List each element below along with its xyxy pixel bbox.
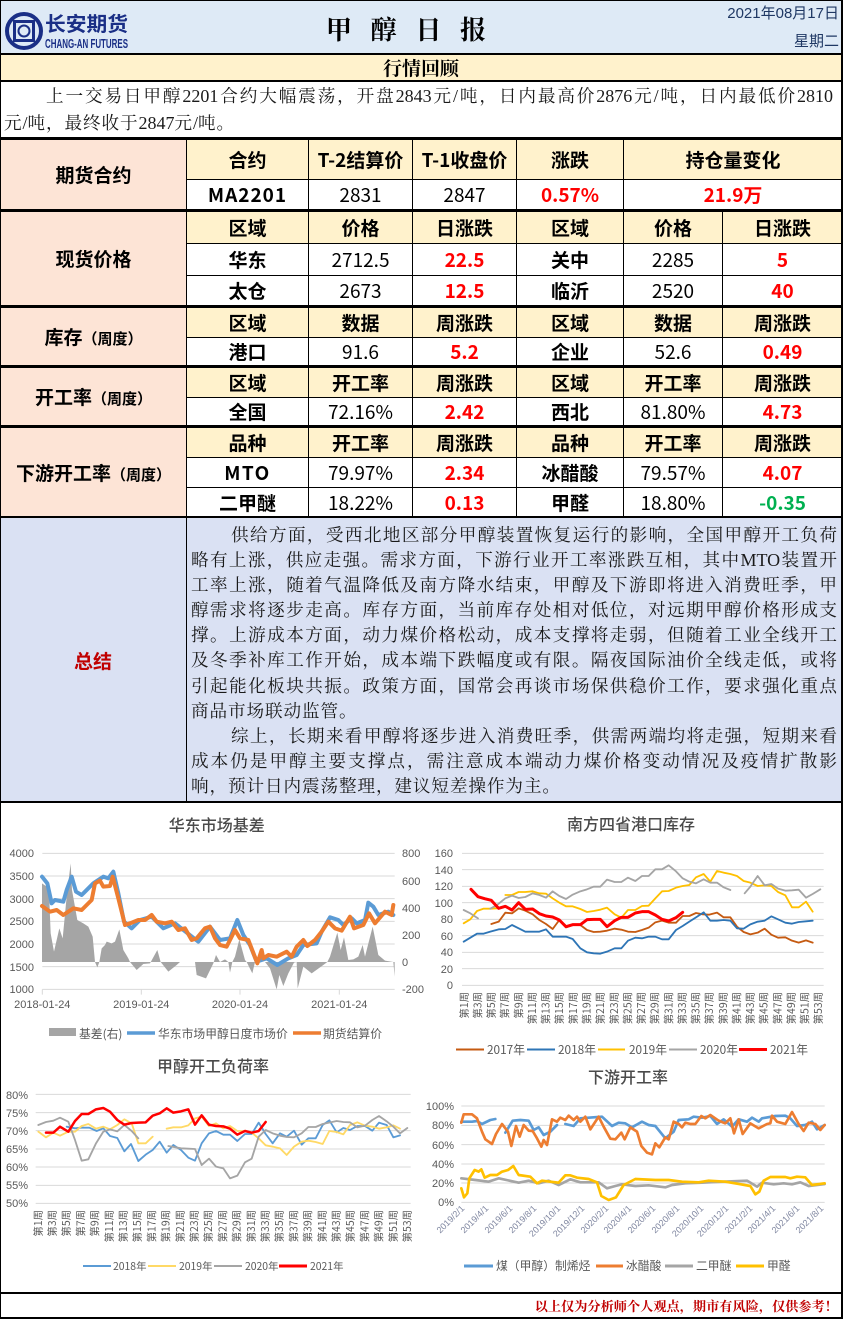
spot row 2: 2673 [339, 277, 382, 304]
chart: downstream operating rate [426, 1064, 825, 1274]
inventory header row [1, 308, 841, 365]
right axis labels: 0 [402, 957, 408, 969]
week axis labels: 第19周 [578, 992, 594, 1024]
spot header row: 区域 [551, 214, 589, 241]
summary text: 醇需求将逐步走高。库存方面，当前库存处相对低位，对远期甲醇价格形成支 [191, 600, 837, 620]
chart title: 华东市场基差 [169, 812, 265, 836]
panel: spot price [0, 210, 843, 306]
date axis labels: 2020/8/1 [650, 1203, 681, 1235]
operating rate values row: 全国 [228, 398, 266, 425]
date axis labels: 2021/8/1 [794, 1203, 825, 1235]
legend: 甲醛 [767, 1257, 791, 1274]
week axis labels: 第7周 [497, 992, 512, 1019]
y axis labels [426, 1101, 454, 1209]
legend: 2019年 [629, 1041, 667, 1058]
y axis labels: 55% [6, 1180, 28, 1192]
y axis labels: 50% [6, 1198, 28, 1210]
y axis labels: 75% [6, 1108, 28, 1120]
logo [5, 10, 128, 51]
week axis labels: 第53周 [399, 1210, 414, 1242]
week axis labels: 第19周 [158, 1210, 173, 1242]
week axis labels: 第13周 [115, 1210, 130, 1242]
week axis labels: 第3周 [44, 1210, 59, 1237]
operating rate values row: 4.73 [763, 398, 802, 425]
summary text: 工率上涨，随着气温降低及南方降水结束，甲醇及下游即将进入消费旺季，甲 [191, 575, 837, 595]
futures header row: 涨跌 [551, 146, 589, 173]
operating rate values row: 2.42 [445, 398, 484, 425]
panel: downstream operating rate: 下游开工率（周度） [16, 459, 171, 486]
summary text [191, 525, 837, 796]
panel: downstream operating rate [0, 426, 843, 518]
week axis labels: 第35周 [271, 1210, 286, 1242]
date axis labels: 2019/8/1 [507, 1203, 538, 1235]
y axis labels: 20 [441, 964, 453, 976]
week axis labels: 第7周 [72, 1210, 87, 1237]
downstream row 1: 2.34 [445, 459, 484, 486]
panel: operating rate [0, 366, 843, 426]
operating rate header row: 开工率 [332, 369, 389, 396]
date: 2021年08月17日 [727, 5, 839, 22]
inventory values row: 0.49 [763, 338, 802, 365]
date axis labels: 2020/4/1 [602, 1203, 633, 1235]
legend: 2021年 [310, 1258, 343, 1273]
y axis labels: 100 [435, 898, 453, 910]
y axis labels: 160 [435, 848, 453, 860]
spot row 1: 关中 [551, 246, 589, 273]
legend: 2018年 [558, 1041, 596, 1058]
panel: spot price: 现货价格 [55, 245, 132, 272]
week axis labels: 第49周 [783, 992, 798, 1024]
spot header row: 日涨跌 [436, 214, 493, 241]
futures header row: 合约 [228, 146, 266, 173]
downstream row 1: MTO [224, 459, 271, 486]
spot header row: 日涨跌 [754, 214, 811, 241]
right axis labels [402, 848, 424, 996]
inventory header row: 周涨跌 [436, 309, 493, 336]
chart title: 下游开工率 [588, 1064, 668, 1088]
downstream row 2: 0.13 [445, 489, 484, 516]
y axis labels: 65% [6, 1144, 28, 1156]
week axis labels: 第47周 [769, 992, 784, 1024]
y axis labels: 0% [438, 1197, 454, 1209]
inventory header row: 周涨跌 [754, 309, 811, 336]
operating rate header row [1, 368, 841, 425]
futures values row [208, 181, 762, 208]
week axis labels: 第27周 [633, 992, 648, 1024]
legend: 煤（甲醇）制烯烃 [496, 1257, 591, 1274]
downstream row 1 [224, 459, 802, 486]
y axis labels: 60 [441, 931, 453, 943]
week axis labels: 第43周 [328, 1210, 343, 1242]
futures values row: 21.9万 [704, 181, 762, 208]
inventory header row: 数据 [341, 309, 380, 336]
plot lines and area [42, 853, 395, 995]
week axis labels: 第45周 [342, 1210, 357, 1242]
legend: 期货结算价 [323, 1025, 382, 1042]
market review text: 上一交易日甲醇2201合约大幅震荡，开盘2843元/吨，日内最高价2876元/吨，日内最低价2810 [46, 86, 833, 106]
operating rate header row: 开工率 [644, 369, 702, 396]
summary text: 略有上涨，供应走强。需求方面，下游行业开工率涨跌互相，其中MTO装置开 [191, 550, 837, 570]
spot row 1 [228, 246, 788, 273]
disclaimer: 以上仅为分析师个人观点，期市有风险，仅供参考！ [535, 1296, 838, 1315]
futures values row: 0.57% [541, 181, 599, 208]
downstream row 1: 79.57% [641, 459, 705, 486]
operating rate header row: 周涨跌 [436, 369, 493, 396]
summary text: 供给方面，受西北地区部分甲醇装置恢复运行的影响，全国甲醇开工负荷 [231, 525, 837, 545]
left axis labels: 1500 [10, 962, 34, 974]
downstream row 2: 二甲醚 [219, 489, 276, 516]
legend [83, 1258, 343, 1273]
spot row 2: 太仓 [228, 277, 266, 304]
market review text [4, 86, 833, 133]
weekday: 星期二 [794, 30, 839, 51]
y axis labels: 80% [432, 1120, 454, 1132]
operating rate header row: 开工率（周度） [35, 383, 152, 410]
legend: 二甲醚 [696, 1257, 732, 1274]
summary text: 商品市场联动监管。 [191, 701, 357, 721]
left axis labels: 2000 [10, 939, 34, 951]
week axis labels [30, 1210, 414, 1242]
date axis labels: 2021/2/1 [723, 1203, 754, 1235]
date axis labels: 2020/6/1 [626, 1203, 657, 1235]
futures values row: 2847 [443, 181, 486, 208]
operating rate values row: 72.16% [328, 398, 393, 425]
inventory values row: 91.6 [342, 338, 379, 365]
downstream header row: 品种 [551, 429, 589, 456]
right axis labels: 600 [402, 876, 420, 888]
date axis labels: 2020/10/1 [670, 1203, 705, 1239]
legend: 基差(右) [79, 1025, 122, 1042]
downstream row 2: 18.22% [328, 489, 393, 516]
downstream row 2: -0.35 [759, 489, 806, 516]
legend: 2020年 [700, 1041, 738, 1058]
spot header row [1, 212, 841, 305]
right axis labels: 800 [402, 848, 420, 860]
spot row 2: 12.5 [445, 277, 484, 304]
week axis labels: 第51周 [797, 992, 812, 1024]
week axis labels: 第9周 [510, 992, 525, 1019]
y axis labels [435, 848, 453, 992]
week axis labels: 第49周 [371, 1210, 386, 1242]
panel: summary background [0, 518, 842, 802]
week axis labels: 第41周 [728, 992, 744, 1024]
legend: 2017年 [487, 1041, 525, 1058]
spot row 2 [228, 277, 794, 304]
downstream header row: 品种 [228, 429, 266, 456]
date axis labels: 2021/6/1 [770, 1203, 801, 1235]
chart: East China basis [10, 812, 424, 1042]
spot row 2: 临沂 [551, 277, 589, 304]
operating rate values row: 81.80% [641, 398, 705, 425]
week axis labels: 第15周 [129, 1210, 144, 1242]
futures header row: 期货合约 [55, 161, 132, 188]
week axis labels: 第17周 [143, 1210, 158, 1242]
date axis labels: 2019/6/1 [483, 1203, 514, 1235]
week axis labels: 第29周 [229, 1210, 244, 1242]
plot lines [462, 853, 824, 985]
y axis labels: 40% [432, 1159, 454, 1171]
week axis labels: 第23周 [606, 992, 621, 1024]
week axis labels: 第33周 [674, 992, 689, 1024]
week axis labels: 第11周 [524, 992, 539, 1024]
spot row 1: 2285 [652, 246, 694, 273]
panel: inventory [0, 306, 843, 366]
panel: futures contract [0, 138, 843, 210]
downstream header row: 开工率 [332, 429, 389, 456]
week axis labels: 第21周 [172, 1210, 187, 1242]
spot row 1: 2712.5 [331, 246, 390, 273]
downstream header row: 开工率 [644, 429, 702, 456]
y axis labels: 70% [6, 1126, 28, 1138]
downstream header row: 周涨跌 [436, 429, 493, 456]
week axis labels: 第3周 [469, 992, 484, 1019]
week axis labels: 第23周 [186, 1210, 201, 1242]
week axis labels: 第25周 [200, 1210, 215, 1242]
week axis labels [456, 992, 825, 1024]
operating rate header row: 周涨跌 [754, 369, 811, 396]
spot header row: 价格 [341, 214, 380, 241]
summary text: 及冬季补库工作开始，成本端下跌幅度或有限。隔夜国际油价全线走低，或将 [191, 650, 837, 670]
spot header row: 价格 [654, 214, 692, 241]
date axis labels: 2019/4/1 [459, 1203, 490, 1235]
operating rate header row: 区域 [228, 369, 266, 396]
futures header row: T-1收盘价 [422, 146, 507, 173]
y axis labels: 100% [426, 1101, 454, 1113]
week axis labels: 第31周 [243, 1210, 258, 1242]
week axis labels: 第11周 [101, 1210, 116, 1242]
inventory header row: 数据 [654, 309, 692, 336]
downstream row 1: 冰醋酸 [541, 459, 598, 486]
week axis labels: 第5周 [483, 992, 498, 1019]
week axis labels: 第39周 [715, 992, 730, 1024]
summary label: 总结 [74, 647, 112, 674]
y axis labels: 60% [432, 1140, 454, 1152]
week axis labels: 第45周 [756, 992, 771, 1024]
legend [49, 1025, 382, 1042]
week axis labels: 第37周 [285, 1210, 300, 1242]
futures header row: 持仓量变化 [686, 146, 781, 173]
legend: 2021年 [770, 1041, 808, 1058]
right axis labels: 400 [402, 903, 420, 915]
week axis labels: 第5周 [58, 1210, 73, 1237]
plot lines [36, 1094, 411, 1203]
downstream row 2 [219, 489, 806, 516]
spot row 1: 22.5 [445, 246, 484, 273]
left axis labels [10, 848, 34, 996]
legend: 2018年 [113, 1258, 146, 1273]
inventory values row [228, 338, 802, 365]
downstream header row [1, 428, 841, 516]
week axis labels: 第9周 [87, 1210, 102, 1237]
y axis labels: 80 [441, 914, 453, 926]
legend: 2019年 [179, 1258, 212, 1273]
inventory values row: 港口 [228, 338, 266, 365]
downstream row 1: 79.97% [328, 459, 393, 486]
plot lines [461, 1106, 825, 1202]
downstream header row: 周涨跌 [754, 429, 811, 456]
y axis labels: 20% [432, 1178, 454, 1190]
inventory values row: 5.2 [450, 338, 479, 365]
week axis labels: 第21周 [592, 992, 607, 1024]
summary text: 综上，长期来看甲醇将逐步进入消费旺季，供需两端均将走强，短期来看 [231, 726, 837, 746]
futures header row: T-2结算价 [318, 146, 403, 173]
y axis labels: 120 [435, 881, 453, 893]
spot row 2: 2520 [652, 277, 694, 304]
week axis labels: 第17周 [565, 992, 580, 1024]
summary text: 引起能化板块共振。政策方面，国常会再谈市场保供稳价工作，要求强化重点 [191, 676, 837, 696]
y axis labels: 40 [441, 947, 453, 959]
y axis labels: 0 [447, 980, 453, 992]
chart: methanol operating load [6, 1053, 414, 1273]
futures values row: MA2201 [208, 181, 287, 208]
date axis labels: 2019/2/1 [435, 1203, 466, 1235]
legend [456, 1041, 808, 1058]
date axis labels: 2019-01-24 [113, 999, 169, 1011]
inventory header row: 区域 [228, 309, 266, 336]
inventory header row: 库存（周度） [44, 323, 143, 350]
left axis labels: 3500 [10, 871, 34, 883]
section heading: market review [0, 55, 842, 81]
week axis labels: 第33周 [257, 1210, 272, 1242]
date axis labels: 2019/12/1 [551, 1203, 586, 1239]
week axis labels: 第1周 [456, 992, 471, 1019]
data table [1, 137, 841, 516]
left axis labels: 4000 [10, 848, 34, 860]
week axis labels: 第13周 [538, 992, 553, 1024]
week axis labels: 第15周 [551, 992, 566, 1024]
inventory header row: 区域 [551, 309, 589, 336]
futures values row: 2831 [339, 181, 382, 208]
legend: 2020年 [245, 1258, 278, 1273]
week axis labels: 第25周 [619, 992, 634, 1024]
week axis labels: 第47周 [356, 1210, 371, 1242]
date axis labels: 2021/4/1 [746, 1203, 777, 1235]
operating rate values row [228, 398, 802, 425]
y axis labels: 60% [6, 1162, 28, 1174]
summary text: 撑。上游成本方面，动力煤价格松动，成本支撑将走弱，但随着工业全线开工 [191, 625, 837, 645]
inventory values row: 52.6 [655, 338, 691, 365]
spot row 2: 40 [771, 277, 794, 304]
chart title: 甲醇开工负荷率 [157, 1053, 269, 1077]
operating rate values row: 西北 [551, 398, 589, 425]
spot header row: 区域 [228, 214, 266, 241]
week axis labels: 第27周 [214, 1210, 229, 1242]
date axis labels: 2018-01-24 [14, 999, 70, 1011]
right axis labels: 200 [402, 930, 420, 942]
date axis labels [14, 999, 367, 1011]
week axis labels: 第41周 [314, 1210, 329, 1242]
legend: 华东市场甲醇日度市场价 [158, 1025, 288, 1042]
legend: 冰醋酸 [626, 1257, 662, 1274]
week axis labels: 第51周 [385, 1210, 400, 1242]
section heading: market review: 行情回顾 [383, 54, 459, 81]
chart title: 南方四省港口库存 [567, 811, 695, 835]
date axis labels [435, 1203, 825, 1239]
date axis labels: 2020/12/1 [695, 1203, 730, 1239]
downstream row 2: 甲醛 [551, 489, 589, 516]
week axis labels: 第37周 [701, 992, 716, 1024]
week axis labels: 第29周 [647, 992, 662, 1024]
downstream row 1: 4.07 [763, 459, 802, 486]
header band [0, 0, 842, 54]
week axis labels: 第1周 [30, 1210, 45, 1237]
week axis labels: 第39周 [300, 1210, 315, 1242]
spot row 1: 华东 [228, 246, 266, 273]
date axis labels: 2019/10/1 [527, 1203, 562, 1239]
week axis labels: 第35周 [688, 992, 703, 1024]
right axis labels: -200 [402, 984, 424, 996]
spot row 1: 5 [777, 246, 788, 273]
summary text: 成本仍是甲醇主要支撑点，需注意成本端动力煤价格变动情况及疫情扩散影 [191, 751, 837, 771]
date axis labels: 2021-01-24 [311, 999, 367, 1011]
y axis labels: 80% [6, 1090, 28, 1102]
inventory values row: 企业 [551, 338, 589, 365]
week axis labels: 第31周 [660, 992, 675, 1024]
date axis labels: 2020-01-24 [212, 999, 268, 1011]
week axis labels: 第43周 [742, 992, 757, 1024]
y axis labels [6, 1090, 28, 1210]
futures header row [1, 140, 841, 209]
left axis labels: 1000 [10, 984, 34, 996]
legend [464, 1257, 791, 1274]
week axis labels: 第53周 [810, 992, 825, 1024]
market review text: 元/吨，最终收于2847元/吨。 [4, 113, 235, 133]
date axis labels: 2020/2/1 [579, 1203, 610, 1235]
downstream row 2: 18.80% [641, 489, 705, 516]
chart: port inventory [435, 811, 825, 1058]
summary text: 响，预计日内震荡整理，建议短差操作为主。 [191, 776, 561, 796]
y axis labels: 140 [435, 865, 453, 877]
left axis labels: 2500 [10, 916, 34, 928]
left axis labels: 3000 [10, 894, 34, 906]
title: 甲 醇 日 报 [326, 10, 486, 47]
operating rate header row: 区域 [551, 369, 589, 396]
